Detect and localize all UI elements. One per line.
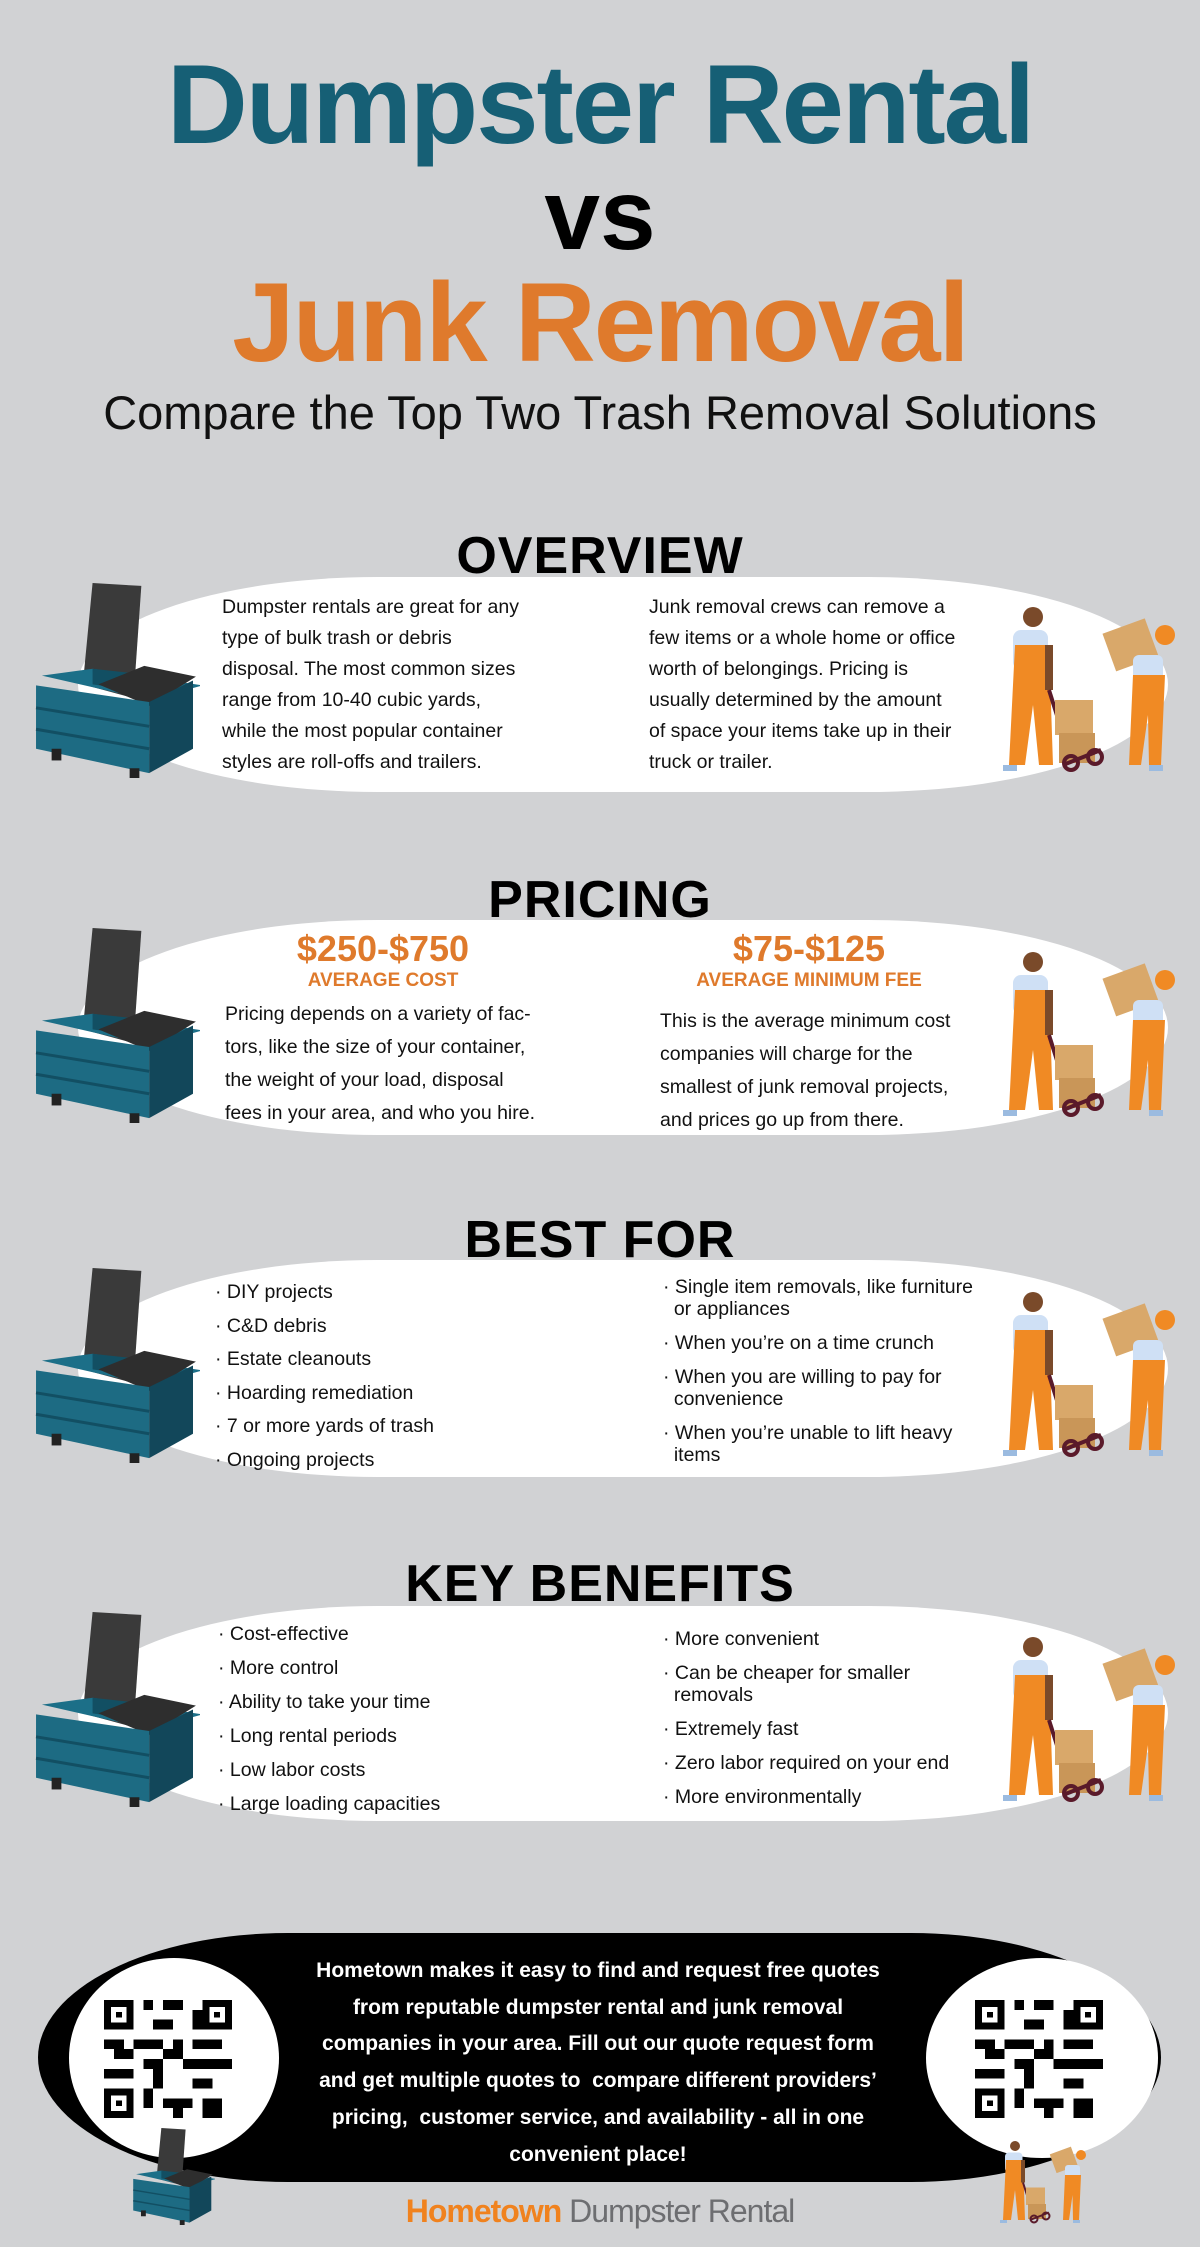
list: best for dumpster: · 7 or more yards of trash (215, 1415, 434, 1437)
icon: dumpster benefits (36, 1612, 200, 1807)
text: pricing junk: This is the average minimum cost (660, 1010, 950, 1032)
heading: best for: BEST FOR (465, 1211, 735, 1269)
list: best for junk: · When you are willing to pay for (663, 1366, 942, 1388)
text: pricing junk: and prices go up from there. (660, 1109, 904, 1131)
panel: best for (78, 1260, 1168, 1477)
panel: overview (78, 577, 1168, 792)
price: dumpster: $250-$750 (297, 928, 469, 969)
list: benefits dumpster: · Large loading capacities (218, 1793, 440, 1815)
list: benefits dumpster: · Cost-effective (218, 1623, 349, 1645)
icon: workers benefits (1003, 1637, 1175, 1802)
text: footer: Hometown makes it easy to find and request free quotes (316, 1959, 880, 1982)
text: overview junk: truck or trailer. (649, 751, 773, 773)
text: footer: from reputable dumpster rental and junk removal (353, 1996, 843, 2019)
list: best for dumpster (215, 1281, 434, 1471)
title: Dumpster Rental (167, 42, 1033, 167)
list: benefits junk: removals (674, 1684, 753, 1706)
list: benefits junk (663, 1628, 949, 1808)
list: benefits dumpster: · Ability to take your time (218, 1691, 430, 1713)
text: pricing dumpster: the weight of your load, disposal (225, 1069, 504, 1091)
footer: black pill (38, 1933, 1161, 2182)
icon: workers best for (1003, 1292, 1175, 1457)
list: best for dumpster: · C&D debris (215, 1315, 327, 1337)
text: footer: companies in your area. Fill out our quote request form (322, 2032, 874, 2055)
list: best for junk: items (674, 1444, 720, 1466)
icon: workers pricing (1003, 952, 1175, 1117)
price: dumpster (297, 928, 469, 991)
icon: small dumpster footer (133, 2128, 215, 2225)
list: best for junk: · Single item removals, like furniture (663, 1276, 973, 1298)
list: benefits dumpster: · Long rental periods (218, 1725, 397, 1747)
price: junk (696, 928, 922, 991)
text: overview dumpster: type of bulk trash or debris (222, 627, 452, 649)
panel: pricing (78, 920, 1168, 1135)
heading: pricing: PRICING (488, 871, 712, 929)
list: best for dumpster: · Hoarding remediation (215, 1382, 413, 1404)
text: footer: convenient place! (509, 2143, 687, 2166)
text: overview dumpster: styles are roll-offs and trailers. (222, 751, 482, 773)
list: benefits dumpster: · Low labor costs (218, 1759, 365, 1781)
text: overview dumpster: Dumpster rentals are great for any (222, 596, 519, 618)
icon: dumpster pricing (36, 928, 200, 1123)
text: pricing junk (660, 1010, 950, 1131)
list: benefits junk: · More convenient (663, 1628, 819, 1650)
logo: Hometown Dumpster Rental (406, 2193, 794, 2229)
list: benefits dumpster (218, 1623, 440, 1815)
text: overview junk: Junk removal crews can remove a (649, 596, 945, 618)
heading: key benefits: KEY BENEFITS (405, 1555, 795, 1613)
title: vs (544, 159, 656, 271)
text: overview dumpster: range from 10-40 cubic yards, (222, 689, 481, 711)
text: pricing dumpster: Pricing depends on a variety of fac- (225, 1003, 531, 1025)
text: footer: and get multiple quotes to compare different providers’ (319, 2069, 877, 2092)
text: footer (316, 1959, 880, 2166)
list: benefits junk: · Extremely fast (663, 1718, 798, 1740)
price: junk: AVERAGE MINIMUM FEE (696, 970, 922, 991)
text: overview dumpster: disposal. The most common sizes (222, 658, 515, 680)
list: benefits junk: · Can be cheaper for smaller (663, 1662, 910, 1684)
icon: small workers footer (1000, 2141, 1086, 2224)
text: overview dumpster (222, 596, 519, 773)
text: overview junk: usually determined by the amount (649, 689, 942, 711)
list: best for junk: · When you’re unable to lift heavy (663, 1422, 952, 1444)
list: best for dumpster: · Ongoing projects (215, 1449, 374, 1471)
icon: workers overview (1003, 607, 1175, 772)
icon: dumpster best for (36, 1268, 200, 1463)
text: pricing dumpster (225, 1003, 535, 1124)
icon: dumpster overview (36, 583, 200, 778)
list: benefits junk: · Zero labor required on your end (663, 1752, 949, 1774)
list: best for junk: · When you’re on a time crunch (663, 1332, 934, 1354)
list: benefits junk: · More environmentally (663, 1786, 861, 1808)
price: junk: $75-$125 (733, 928, 885, 969)
list: benefits dumpster: · More control (218, 1657, 338, 1679)
text: footer: pricing, customer service, and availability - all in one (332, 2106, 864, 2129)
text: pricing dumpster: fees in your area, and who you hire. (225, 1102, 535, 1124)
text: overview junk: worth of belongings. Pricing is (649, 658, 908, 680)
list: best for junk (663, 1276, 973, 1466)
text: pricing dumpster: tors, like the size of your container, (225, 1036, 525, 1058)
text: overview dumpster: while the most popular container (222, 720, 503, 742)
list: best for junk: or appliances (674, 1298, 790, 1320)
title (167, 42, 1033, 385)
panel: key benefits (78, 1606, 1168, 1821)
list: best for junk: convenience (674, 1388, 783, 1410)
text: overview junk: few items or a whole home or office (649, 627, 955, 649)
heading: overview: OVERVIEW (456, 527, 744, 585)
list: best for dumpster: · DIY projects (215, 1281, 333, 1303)
QR right (926, 1958, 1158, 2158)
text: pricing junk: companies will charge for the (660, 1043, 913, 1065)
QR left (69, 1958, 279, 2158)
text: pricing junk: smallest of junk removal projects, (660, 1076, 948, 1098)
text: overview junk: of space your items take up in their (649, 720, 951, 742)
subtitle: Compare the Top Two Trash Removal Solutions (103, 386, 1097, 439)
title: Junk Removal (232, 260, 968, 385)
text: overview junk (649, 596, 955, 773)
price: dumpster: AVERAGE COST (308, 970, 458, 991)
list: best for dumpster: · Estate cleanouts (215, 1348, 371, 1370)
